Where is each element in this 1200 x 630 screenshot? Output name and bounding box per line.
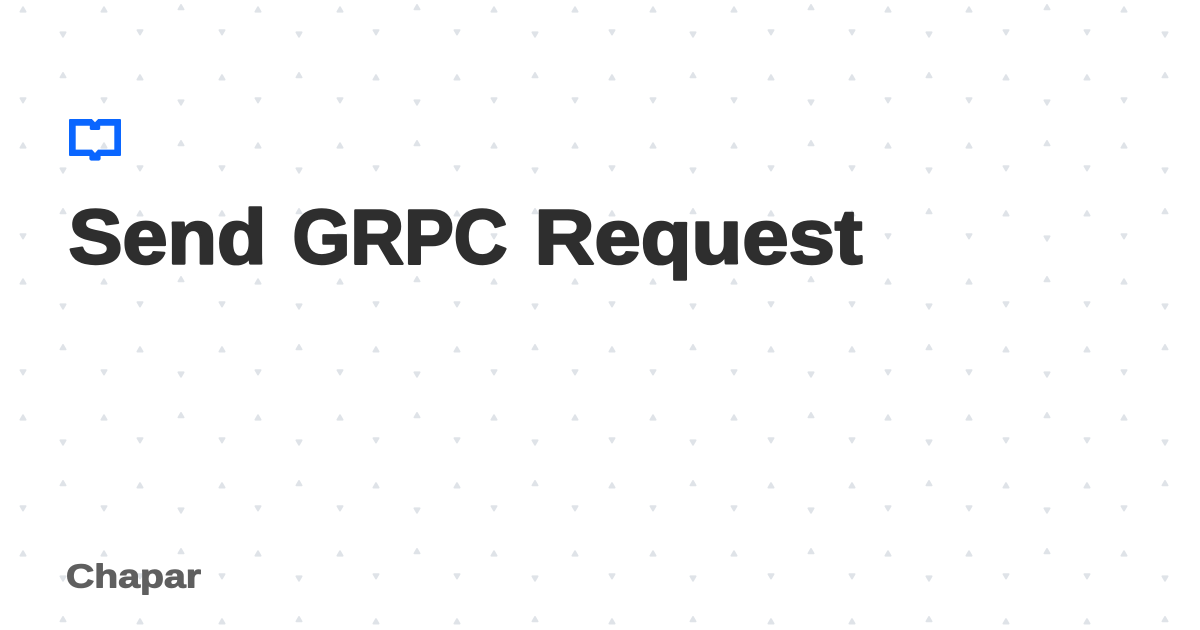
brand name: Chapar xyxy=(66,558,201,596)
title: Send xyxy=(68,194,266,280)
title: GRPC xyxy=(292,194,508,280)
icon: open book xyxy=(69,119,121,161)
title: Request xyxy=(534,194,862,280)
title xyxy=(68,194,862,280)
